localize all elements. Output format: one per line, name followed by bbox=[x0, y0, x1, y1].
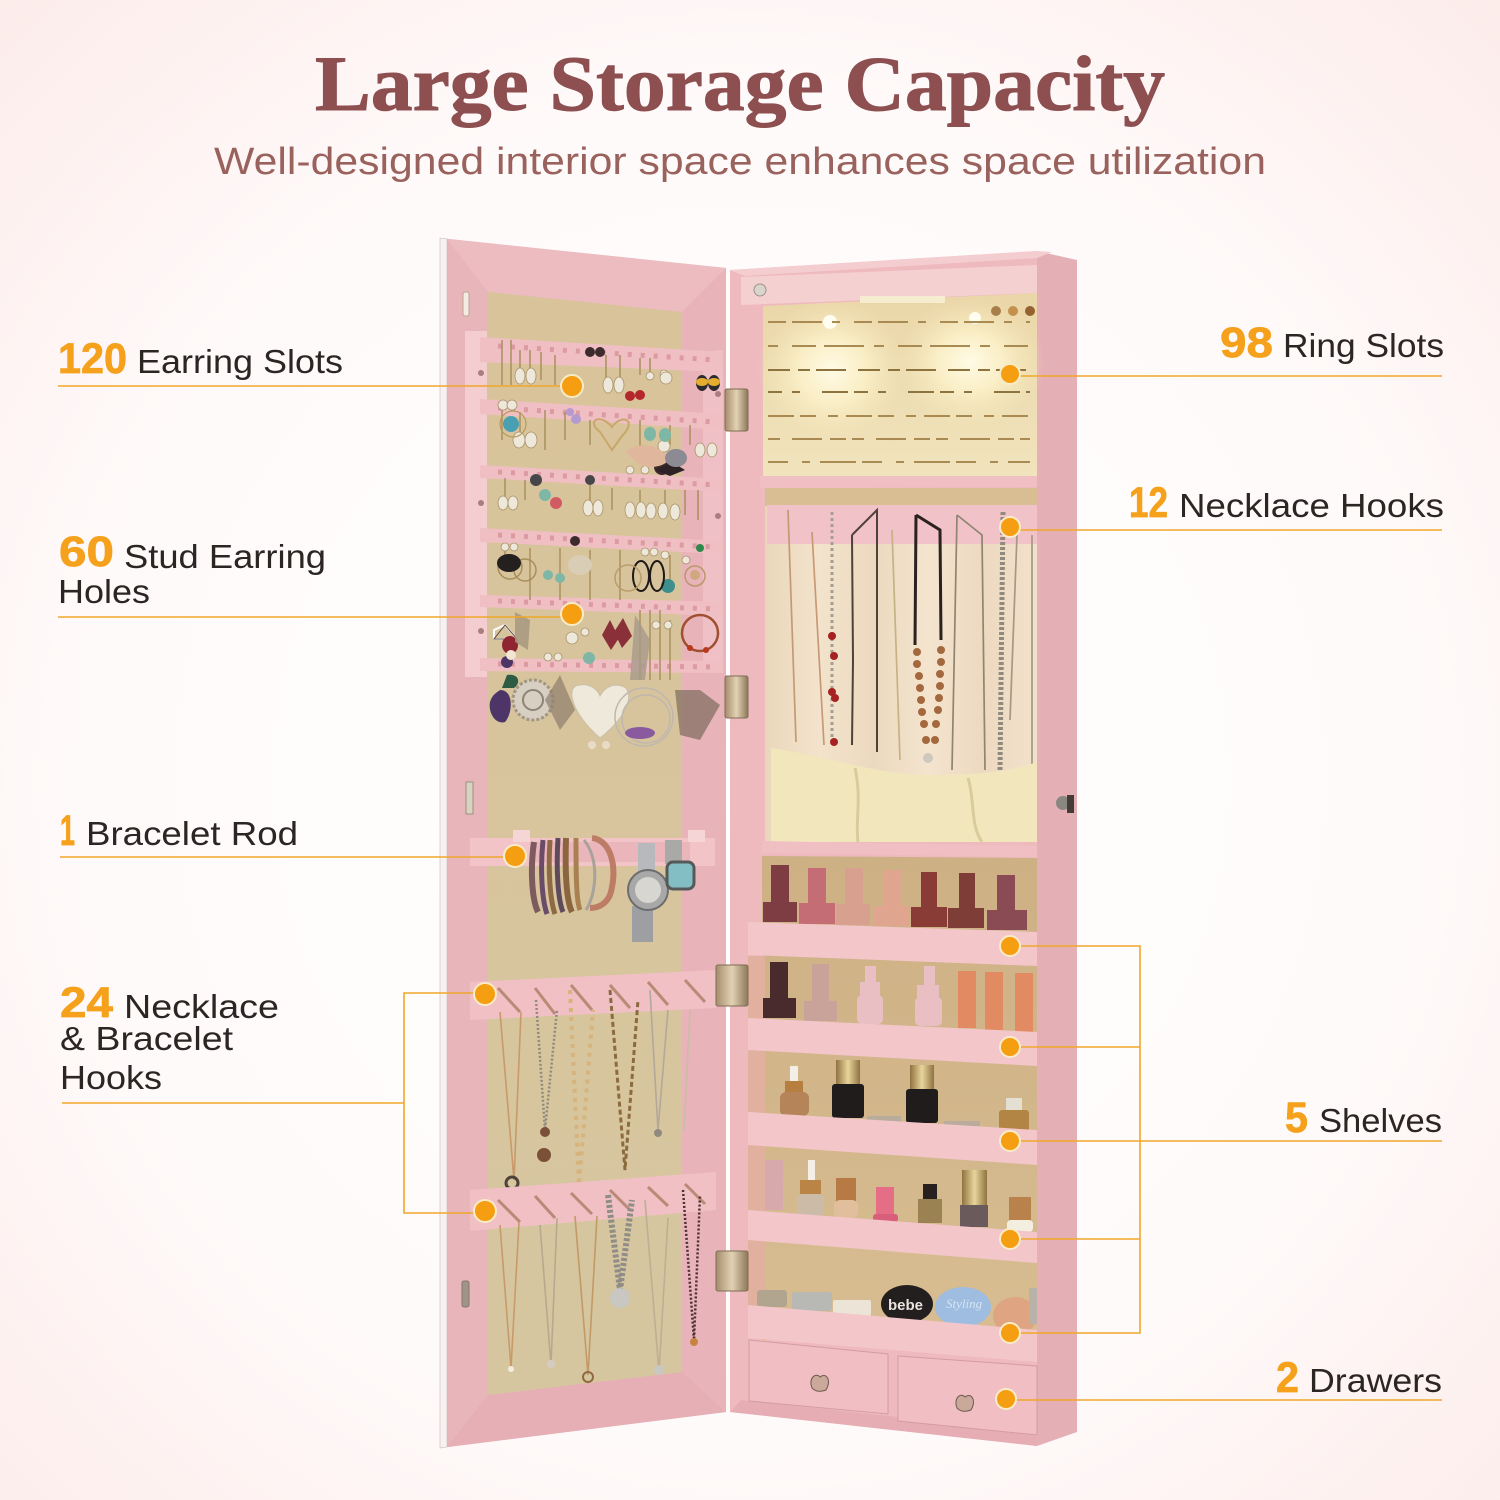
shelf 5 products bbox=[757, 1285, 1037, 1335]
callout: 120 earring slots bbox=[58, 335, 583, 397]
subtitle: Well-designed interior space enhances space utilization bbox=[214, 141, 1266, 183]
callout: 98 ring slots bbox=[1000, 319, 1444, 384]
dangling large earrings bbox=[490, 650, 720, 749]
callout: 120 earring slots: Earring Slots bbox=[137, 343, 343, 380]
callout: 60 stud earring holes: Holes bbox=[58, 573, 150, 610]
hanging necklaces bbox=[788, 510, 1032, 770]
shelf 2 products bbox=[763, 962, 1033, 1032]
door latch bottom bbox=[462, 1281, 469, 1307]
shelf 4 bbox=[748, 1210, 1037, 1263]
callout: 1 bracelet rod bbox=[60, 807, 526, 867]
callout: 12 necklace hooks: Necklace Hooks bbox=[1179, 487, 1444, 524]
cabinet body bbox=[730, 251, 1077, 1446]
callout: 5 shelves: Shelves bbox=[1319, 1102, 1442, 1139]
necklaces upper bbox=[500, 990, 690, 1189]
callout: 12 necklace hooks bbox=[1000, 479, 1444, 537]
callout: 1 bracelet rod: Bracelet Rod bbox=[86, 815, 298, 852]
shelf compartment backing bbox=[748, 856, 1037, 1340]
callout: 24 necklace and bracelet hooks: Necklace bbox=[124, 988, 279, 1025]
shelf 3 products bbox=[780, 1060, 1029, 1132]
pocket bbox=[771, 748, 1037, 842]
hook bar bbox=[767, 505, 1037, 544]
title: Large Storage Capacity bbox=[315, 40, 1165, 127]
bracelet rod bbox=[470, 830, 715, 942]
callout: 2 drawers bbox=[996, 1354, 1442, 1409]
necklaces lower bbox=[500, 1190, 700, 1382]
necklace hook bar 1 bbox=[470, 970, 716, 1189]
shelf 1 products bbox=[763, 865, 1027, 930]
drawer right bbox=[898, 1356, 1037, 1435]
necklace hook bar 2 bbox=[470, 1172, 716, 1382]
lock screw bbox=[754, 284, 766, 296]
earrings bbox=[490, 340, 720, 749]
ring display panel bbox=[757, 293, 1045, 488]
shelf 2 bbox=[748, 1018, 1037, 1066]
side knob bbox=[1056, 795, 1074, 813]
callout: 24 necklace and bracelet hooks: 24 bbox=[60, 979, 113, 1027]
necklace compartment bbox=[762, 488, 1037, 857]
callout: 98 ring slots: 98 bbox=[1220, 319, 1273, 367]
callout: 24 necklace and bracelet hooks: Hooks bbox=[60, 1059, 162, 1096]
shelf 4 products bbox=[765, 1160, 1033, 1232]
callout: 98 ring slots: Ring Slots bbox=[1283, 327, 1444, 364]
door latch middle bbox=[466, 782, 473, 814]
earring rack bbox=[465, 331, 723, 677]
callout: 2 drawers: Drawers bbox=[1309, 1362, 1442, 1399]
callout: 60 stud earring holes: Stud Earring bbox=[124, 538, 326, 575]
callout: 12 necklace hooks: 12 bbox=[1129, 479, 1168, 527]
callout: 5 shelves: 5 bbox=[1285, 1094, 1308, 1142]
shelf 5 products: Styling bbox=[946, 1296, 983, 1311]
callout: 24 necklace and bracelet hooks bbox=[60, 979, 496, 1222]
callout: 5 shelves bbox=[1000, 936, 1442, 1343]
door latch top bbox=[463, 292, 469, 316]
callout: 2 drawers: 2 bbox=[1276, 1354, 1299, 1402]
shelf 3 bbox=[748, 1112, 1037, 1165]
shelf 1 bbox=[748, 922, 1037, 966]
callout: 60 stud earring holes bbox=[58, 528, 583, 625]
door tan back panel bbox=[488, 292, 682, 1395]
drawer left bbox=[749, 1340, 888, 1414]
ring rows bbox=[768, 322, 1030, 462]
bracelets bbox=[532, 838, 613, 914]
shelf 5 products: bebe bbox=[888, 1297, 923, 1314]
red beads bbox=[828, 632, 839, 746]
watches bbox=[628, 840, 694, 942]
hinges bbox=[716, 389, 748, 1291]
callout: 24 necklace and bracelet hooks: & Bracelet bbox=[60, 1020, 233, 1057]
left door bbox=[440, 238, 726, 1448]
wood beads bbox=[913, 646, 945, 763]
callout: 120 earring slots: 120 bbox=[58, 335, 127, 383]
callout: 60 stud earring holes: 60 bbox=[59, 528, 114, 576]
callout: 1 bracelet rod: 1 bbox=[60, 807, 75, 855]
shelf 5 bbox=[748, 1305, 1037, 1362]
